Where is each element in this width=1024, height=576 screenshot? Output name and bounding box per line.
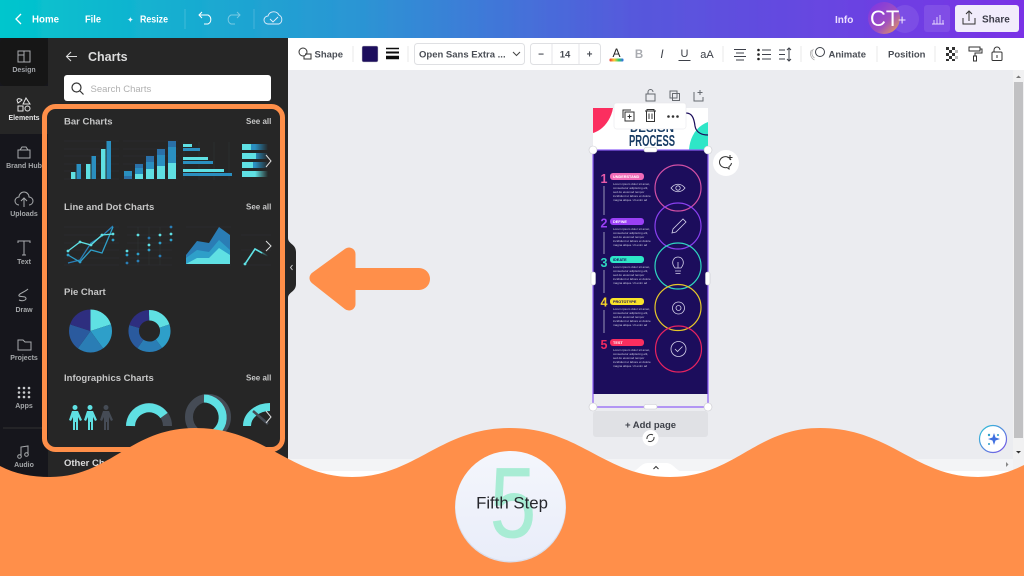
editor toolbar: Shape xyxy=(314,50,343,60)
left icon sidebar xyxy=(0,38,48,498)
design page body with five steps: incididunt ut labore et dolore xyxy=(613,277,651,281)
orange arrow pointing to panel xyxy=(316,254,430,304)
design page body with five steps: sed do eiusmod tempor xyxy=(613,315,644,319)
editor toolbar: aA xyxy=(700,49,714,61)
editor toolbar: I xyxy=(660,49,664,61)
design page body with five steps: magna aliqua. Ut enim ad xyxy=(613,281,648,285)
panel heading labels: Infographics Charts xyxy=(64,373,154,384)
add comment button xyxy=(713,150,739,176)
design page body with five steps: TEST xyxy=(613,341,623,345)
design page body with five steps: incididunt ut labore et dolore xyxy=(613,319,651,323)
design page body with five steps: magna aliqua. Ut enim ad xyxy=(613,323,648,327)
top navigation bar: Resize xyxy=(140,14,168,26)
design page body with five steps: magna aliqua. Ut enim ad xyxy=(613,198,648,202)
scrollbar xyxy=(1006,70,1024,471)
panel heading labels: See all xyxy=(246,374,271,382)
design page body with five steps: sed do eiusmod tempor xyxy=(613,356,644,360)
design page body with five steps: 1 xyxy=(601,172,608,186)
design page body with five steps: incididunt ut labore et dolore xyxy=(613,194,651,198)
editor toolbar xyxy=(288,38,1024,70)
canvas background xyxy=(288,70,1024,501)
design page body with five steps: consectetur adipiscing elit, xyxy=(613,311,648,315)
panel heading labels xyxy=(64,116,271,469)
orange highlight frame around charts xyxy=(44,106,282,450)
step label: Fifth Step xyxy=(476,494,548,512)
large numeral 5: 5 xyxy=(490,447,536,558)
rotate handle xyxy=(642,430,658,446)
design page body with five steps: Lorem ipsum dolor sit amet, xyxy=(613,182,650,186)
top navigation bar: Info xyxy=(835,15,853,26)
selection frame with handles xyxy=(589,146,712,411)
design page body with five steps: 3 xyxy=(601,256,608,270)
design page body with five steps: consectetur adipiscing elit, xyxy=(613,269,648,273)
left icon sidebar: Brand Hub xyxy=(6,163,42,170)
design page body with five steps: UNDERSTAND xyxy=(613,175,640,179)
design page body with five steps: DEFINE xyxy=(613,220,627,224)
design page body with five steps: IDEATE xyxy=(613,258,627,262)
design page body with five steps: 4 xyxy=(601,296,608,310)
editor toolbar: A xyxy=(612,46,621,60)
top navigation bar: CT xyxy=(870,6,899,31)
design page body with five steps: sed do eiusmod tempor xyxy=(613,273,644,277)
orange wave banner xyxy=(0,428,1024,576)
panel heading labels: See all xyxy=(246,202,271,212)
page notes tab xyxy=(630,463,684,472)
editor toolbar: Open Sans Extra ... xyxy=(419,50,506,60)
editor toolbar: U xyxy=(681,48,689,60)
left icon sidebar: Draw xyxy=(15,307,33,314)
add page button xyxy=(593,411,708,437)
step badge xyxy=(455,447,566,562)
line and dot chart thumbnails xyxy=(64,226,271,265)
design page body with five steps: 2 xyxy=(601,216,608,230)
add page button: + Add page xyxy=(625,420,676,431)
top navigation bar: File xyxy=(85,14,101,26)
top navigation bar: Home xyxy=(32,14,59,26)
panel heading labels: See all xyxy=(246,117,271,126)
design page body with five steps: sed do eiusmod tempor xyxy=(613,235,644,239)
panel heading labels: Pie Chart xyxy=(64,287,107,298)
design page header: DESIGN xyxy=(630,120,674,135)
charts side panel: Search Charts xyxy=(90,84,151,95)
editor toolbar: Animate xyxy=(828,50,866,60)
left icon sidebar: Text xyxy=(17,259,32,266)
editor toolbar: + xyxy=(587,50,593,60)
editor toolbar: Position xyxy=(888,50,926,60)
panel heading labels: Bar Charts xyxy=(64,116,113,128)
left icon sidebar: Uploads xyxy=(10,211,38,218)
charts side panel: Charts xyxy=(88,50,128,64)
editor toolbar: B xyxy=(635,49,643,61)
design page body with five steps: consectetur adipiscing elit, xyxy=(613,186,648,190)
magic assistant button xyxy=(980,426,1006,452)
panel heading labels: Other Charts xyxy=(64,458,122,469)
bar chart thumbnails xyxy=(64,141,271,180)
design page body with five steps xyxy=(593,150,708,394)
panel heading labels: Line and Dot Charts xyxy=(64,202,154,213)
design page body with five steps: Lorem ipsum dolor sit amet, xyxy=(613,307,650,311)
design page body with five steps: Lorem ipsum dolor sit amet, xyxy=(613,265,650,269)
top navigation bar: ✦ xyxy=(127,16,134,24)
charts side panel xyxy=(48,38,296,498)
design page header xyxy=(593,108,708,151)
left icon sidebar: Audio xyxy=(14,462,34,469)
design page body with five steps: magna aliqua. Ut enim ad xyxy=(613,243,648,247)
floating context toolbar xyxy=(614,103,686,129)
pie chart thumbnails xyxy=(80,315,165,347)
design page body with five steps: PROTOTYPE xyxy=(613,300,637,304)
design page header: PROCESS xyxy=(629,133,675,150)
design page body with five steps: consectetur adipiscing elit, xyxy=(613,352,648,356)
infographic chart thumbnails xyxy=(69,398,271,436)
design page body with five steps: incididunt ut labore et dolore xyxy=(613,239,651,243)
design page body with five steps: 5 xyxy=(601,338,608,352)
left icon sidebar: Elements xyxy=(8,115,40,122)
design page body with five steps: consectetur adipiscing elit, xyxy=(613,231,648,235)
design page body with five steps: sed do eiusmod tempor xyxy=(613,190,644,194)
top navigation bar: + xyxy=(898,12,906,28)
left icon sidebar: Projects xyxy=(10,355,38,362)
editor toolbar: 14 xyxy=(560,50,571,60)
design page body with five steps: magna aliqua. Ut enim ad xyxy=(613,364,648,368)
design page body with five steps: incididunt ut labore et dolore xyxy=(613,360,651,364)
design page body with five steps: Lorem ipsum dolor sit amet, xyxy=(613,227,650,231)
top navigation bar xyxy=(0,0,1024,38)
left icon sidebar: Apps xyxy=(15,403,33,410)
page action icons xyxy=(646,90,703,101)
top navigation bar: Share xyxy=(982,14,1010,26)
editor toolbar: − xyxy=(538,50,544,60)
design page body with five steps: Lorem ipsum dolor sit amet, xyxy=(613,348,650,352)
left icon sidebar: Design xyxy=(12,67,36,74)
